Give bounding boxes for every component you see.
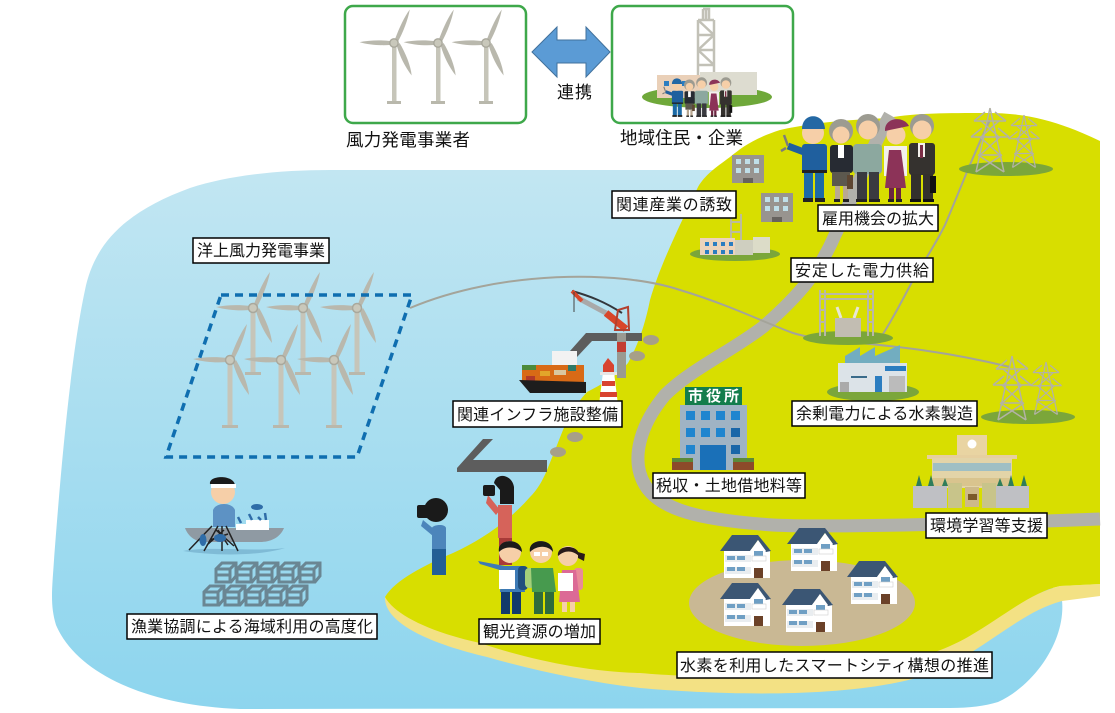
icon: school [913,435,1029,508]
icon: industrial site [690,214,780,261]
label: offshore wind project: 洋上風力発電事業 [197,242,325,260]
label: employment: 雇用機会の拡大 [822,210,934,228]
icon: children with guide sheets [478,541,585,614]
panel frame [345,6,526,123]
sand beach [385,584,1100,693]
icon: photographer in blue [417,498,448,575]
turbines [193,272,376,428]
icon: local people large [781,114,936,202]
arrow: two-way cooperation [532,27,610,77]
sea [52,170,1062,709]
panel: wind power operators [345,6,526,123]
label: smart city [677,652,992,678]
icon: smart city houses [689,528,915,646]
pier south [457,439,547,472]
icon: city hall [672,387,754,470]
icon: photographer in red [483,476,514,565]
label: tourism [479,619,600,644]
icon: tower [698,9,714,76]
label: residents and companies: 地域住民・企業 [620,128,743,148]
label: related infrastructure: 関連インフラ施設整備 [457,406,618,424]
label: tourism: 観光資源の増加 [483,623,596,641]
icon: lower pylons [981,356,1075,424]
label: environmental education: 環境学習等支援 [930,517,1043,535]
icon: town on green base [642,72,772,108]
panel: offshore wind farm [166,272,412,457]
label: hydrogen production: 余剰電力による水素製造 [796,405,973,423]
label: attracting industry [612,191,736,218]
label: offshore wind project [193,238,329,263]
label: tax revenue [653,473,805,498]
label: cooperation: 連携 [557,83,592,102]
dashed wind farm area [166,295,412,457]
road [638,115,1100,526]
label: stable power supply: 安定した電力供給 [795,262,929,280]
icon: local people small [662,77,732,117]
power cable [410,277,1010,367]
city hall sign: 市役所 [688,387,739,405]
boy pointing [478,541,528,614]
port infrastructure [457,291,659,472]
icon: hydrogen plant [827,345,919,401]
panel frame [612,6,793,123]
label: hydrogen production [792,401,977,426]
label: fishery cooperation: 漁業協調による海域利用の高度化 [131,618,373,636]
crane [572,291,629,378]
icon: substation [803,290,893,345]
label: smart city: 水素を利用したスマートシティ構想の推進 [680,657,989,675]
land [385,113,1100,677]
label: stable power supply [791,258,933,282]
icon: office building upper [732,155,764,183]
label: environmental education [926,513,1047,538]
boy with glasses [525,541,556,614]
pier north [570,333,642,357]
label: employment [818,205,938,231]
icon: fish cages [204,563,320,605]
icon: fisher on boat [183,477,285,554]
label: fishery cooperation [127,614,377,639]
icon: office building lower [761,193,793,222]
label: related infrastructure [453,401,622,427]
label: attracting industry: 関連産業の誘致 [616,196,732,214]
label: wind power operators: 風力発電事業者 [346,130,470,150]
label: tax revenue: 税収・土地借地料等 [656,477,802,495]
map: sea and land [52,113,1100,709]
panel: local residents and companies [612,6,793,123]
icon: upper pylons [959,108,1053,176]
power cable north [883,120,990,334]
bollards [550,335,659,457]
lighthouse [599,358,618,405]
icon: three wind turbines [360,10,504,104]
ship [519,351,586,393]
girl [558,546,585,612]
